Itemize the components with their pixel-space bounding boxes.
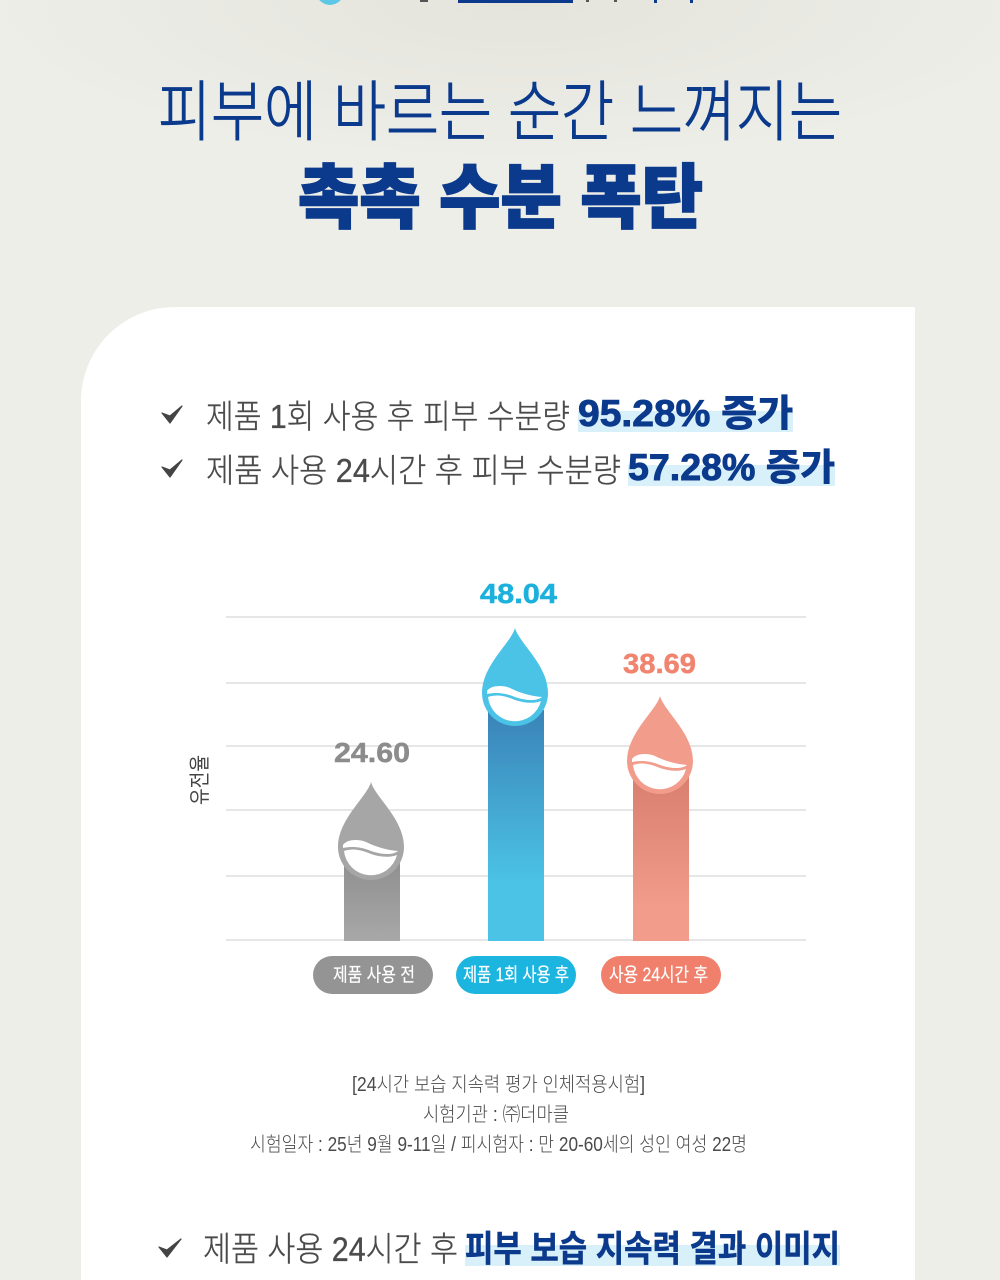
legend pill: 24 hours after: 사용 24시간 후	[609, 964, 708, 986]
legend pill: before use	[313, 956, 433, 994]
result statement 2	[162, 447, 835, 489]
test information note	[250, 1073, 747, 1156]
test information note: 시험일자 : 25년 9월 9-11일 / 피시험자 : 만 20-60세의 성인 여성 22명	[250, 1133, 747, 1156]
legend pill: after one use: 제품 1회 사용 후	[463, 964, 569, 986]
value: 38.69: 38.69	[623, 648, 696, 679]
value: 48.04: 48.04	[480, 578, 557, 609]
result statement 1: 제품 1회 사용 후 피부 수분량	[206, 398, 570, 435]
title	[158, 75, 842, 237]
legend pill: before use: 제품 사용 전	[333, 964, 415, 986]
bottom statement	[159, 1228, 840, 1269]
value: 24.60: 24.60	[334, 737, 410, 768]
test information note: 시험기관 : ㈜더마클	[423, 1103, 569, 1126]
legend pill: after one use	[456, 956, 576, 994]
legend pill: 24 hours after	[601, 956, 721, 994]
result statement 1	[162, 393, 793, 435]
panel: result card	[81, 307, 915, 1280]
bar: after one use	[480, 578, 557, 941]
bottom statement: 피부 보습 지속력 결과 이미지	[465, 1228, 840, 1269]
title line 2: 촉촉 수분 폭탄	[298, 159, 703, 237]
title line 1: 피부에 바르는 순간 느껴지는	[158, 75, 842, 149]
bar chart	[189, 578, 806, 994]
test information note: [24시간 보습 지속력 평가 인체적용시험]	[352, 1073, 645, 1096]
result statement 2: 57.28% 증가	[628, 447, 835, 488]
cropped header remnant	[316, 0, 693, 5]
bar: 24 hours after	[623, 648, 696, 941]
bottom statement: 제품 사용 24시간 후	[203, 1231, 458, 1269]
bar: before use	[334, 737, 410, 941]
y axis label: 유전율	[189, 755, 212, 805]
result statement 2: 제품 사용 24시간 후 피부 수분량	[206, 452, 621, 489]
result statement 1: 95.28% 증가	[578, 393, 793, 434]
